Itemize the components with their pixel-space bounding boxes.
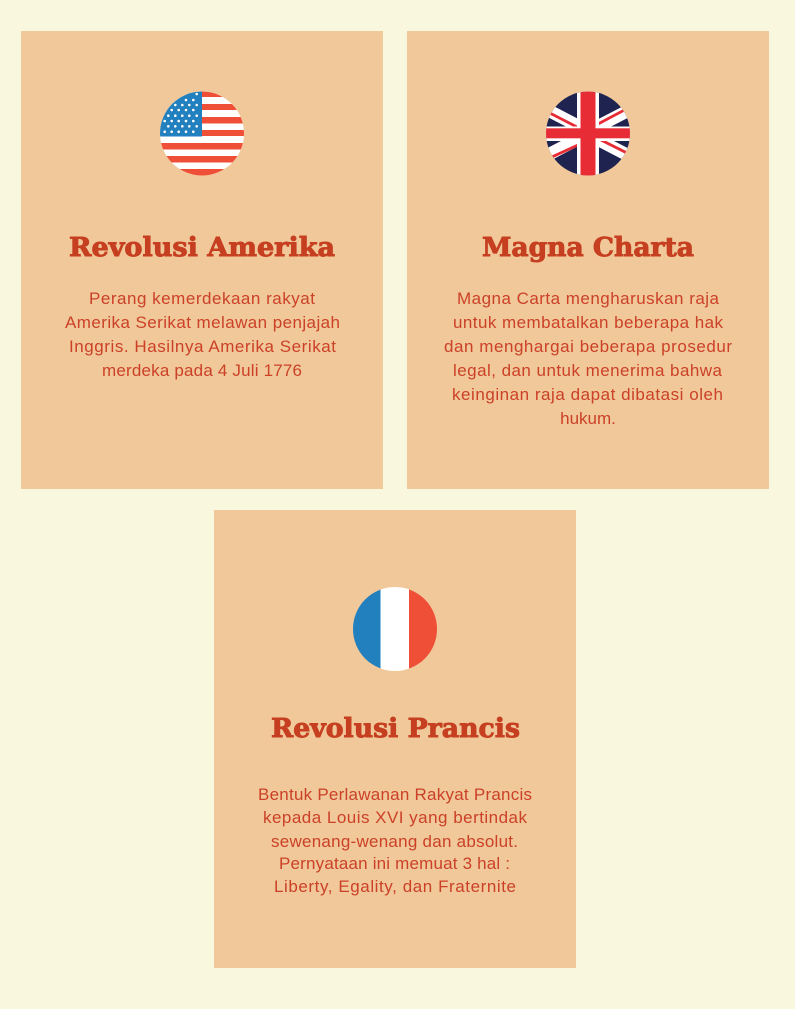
icon: British flag — [546, 92, 630, 176]
heading: Revolusi Prancis: Revolusi Prancis — [271, 714, 520, 744]
text block: Revolusi Prancis description: Pernyataan ini memuat 3 hal : — [279, 854, 510, 873]
text block: Revolusi Prancis description: sewenang-wenang dan absolut. — [271, 832, 518, 851]
text block: Revolusi Prancis description: kepada Louis XVI yang bertindak — [263, 808, 528, 827]
text block: Revolusi Amerika description: Inggris. Hasilnya Amerika Serikat — [69, 337, 336, 356]
icon: American flag — [160, 91, 244, 176]
text block: Magna Charta description: dan menghargai beberapa prosedur — [444, 337, 732, 356]
heading: Revolusi Amerika: Revolusi Amerika — [69, 233, 335, 263]
text block: Magna Charta description: untuk membatalkan beberapa hak — [453, 313, 724, 332]
text block: Revolusi Amerika description: Amerika Serikat melawan penjajah — [65, 313, 340, 332]
text block: Magna Charta description: legal, dan untuk menerima bahwa — [453, 361, 723, 380]
text block: Revolusi Prancis description: Bentuk Perlawanan Rakyat Prancis — [258, 785, 532, 804]
text block: Magna Charta description — [444, 289, 732, 428]
panel: Revolusi Amerika — [21, 31, 383, 489]
text block: Magna Charta description: Magna Carta mengharuskan raja — [457, 289, 720, 308]
text block: Revolusi Prancis description — [258, 785, 532, 896]
text block: Revolusi Amerika description: merdeka pada 4 Juli 1776 — [102, 361, 302, 380]
text block: Revolusi Amerika description: Perang kemerdekaan rakyat — [89, 289, 315, 308]
text block: Revolusi Amerika description — [65, 289, 340, 380]
text block: Revolusi Prancis description: Liberty, Egality, dan Fraternite — [274, 877, 516, 896]
panel: Revolusi Prancis — [214, 510, 576, 968]
text block: Magna Charta description: keinginan raja dapat dibatasi oleh — [452, 385, 723, 404]
text block: Magna Charta description: hukum. — [560, 409, 616, 428]
heading: Magna Charta: Magna Charta — [482, 233, 694, 263]
icon: French flag — [353, 587, 437, 671]
panel: Magna Charta — [407, 31, 769, 489]
